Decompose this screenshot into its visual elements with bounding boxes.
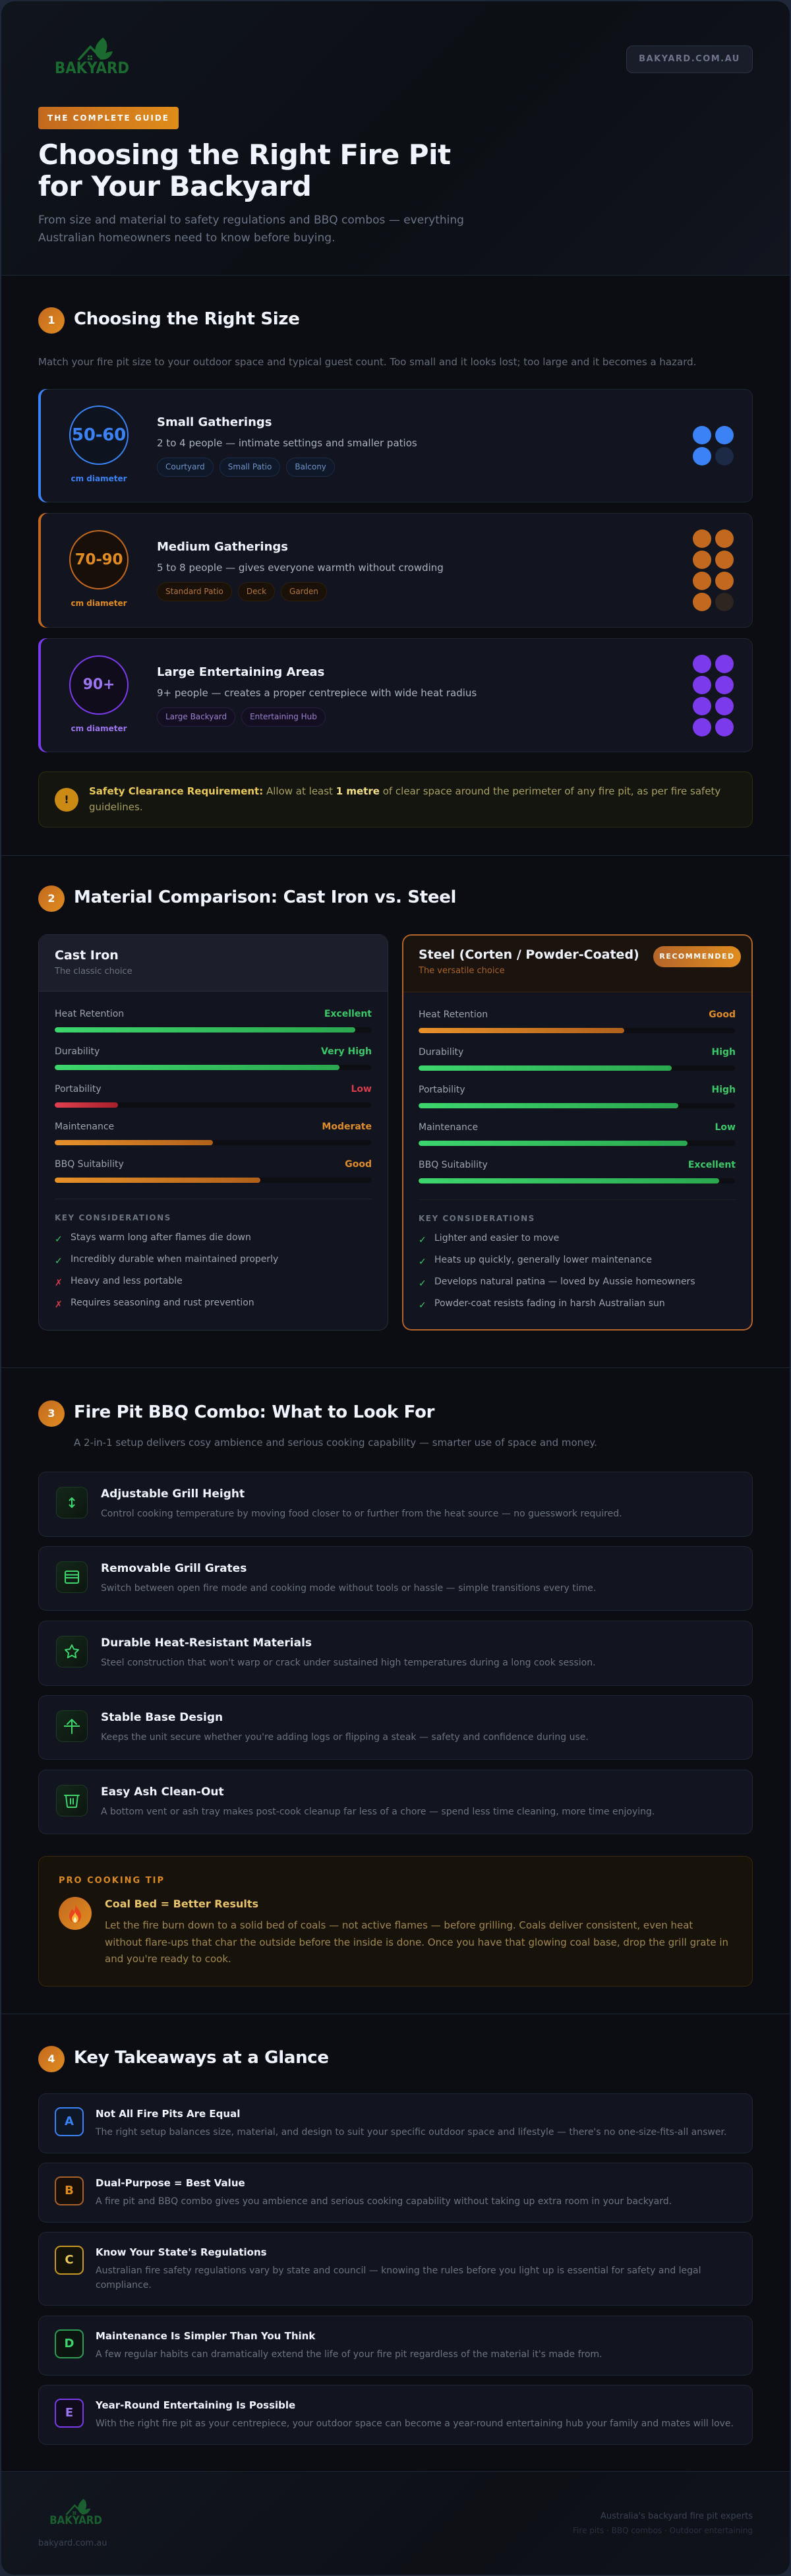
panel: medium gatherings [38, 513, 753, 628]
warning icon [55, 788, 78, 812]
ratings: Low [351, 1084, 372, 1094]
diameter label: cm diameter [71, 724, 127, 733]
diameter ring [69, 405, 129, 465]
location tags: Balcony [295, 462, 326, 471]
feature description: Control cooking temperature by moving food closer to or further from the heat source — no guesswork required. [101, 1509, 622, 1519]
pros and cons list: ✗ [55, 1300, 63, 1310]
panel: small gatherings [38, 389, 753, 502]
card title: Large Entertaining Areas [157, 665, 324, 679]
feature: adjustable grill [38, 1472, 753, 1537]
icon: up-down arrow [56, 1487, 88, 1518]
letter badge [55, 2246, 84, 2275]
panel: cast iron [38, 934, 388, 1331]
logo [55, 38, 129, 73]
pros and cons list: Stays warm long after flames die down [71, 1232, 251, 1243]
feature: ash clean-out [38, 1770, 753, 1834]
footer logo [49, 2499, 102, 2524]
ratings: Maintenance [419, 1122, 478, 1133]
takeaway E [38, 2385, 753, 2445]
section 2 number [38, 885, 65, 912]
feature title: Removable Grill Grates [101, 1562, 247, 1575]
pros and cons list: ✗ [55, 1278, 63, 1288]
section 4 number [38, 2046, 65, 2072]
takeaway B [38, 2163, 753, 2223]
takeaway description: Australian fire safety regulations vary by state and council — knowing the rules before you light up is essential for safety and legal compliance. [96, 2265, 701, 2291]
pros and cons list: Incredibly durable when maintained properly [71, 1254, 278, 1265]
location tags [157, 582, 327, 601]
location tags: Deck [247, 587, 266, 596]
cast iron header [38, 934, 388, 992]
tip title: Coal Bed = Better Results [105, 1898, 258, 1910]
icon: star [56, 1636, 88, 1667]
section 3 number: 3 [47, 1407, 55, 1420]
letter badge [55, 2399, 84, 2428]
section 2 number: 2 [47, 892, 55, 905]
diameter label: cm diameter [71, 599, 127, 608]
section 2 heading: Material Comparison: Cast Iron vs. Steel [74, 887, 456, 907]
ratings: High [711, 1047, 736, 1058]
footer url: bakyard.com.au [38, 2538, 107, 2548]
location tags: Courtyard [165, 462, 205, 471]
letter badge: E [65, 2406, 73, 2420]
ratings: Heat Retention [55, 1009, 124, 1019]
recommended badge [653, 946, 741, 967]
takeaway A [38, 2093, 753, 2153]
takeaway description: With the right fire pit as your centrepiece, your outdoor space can become a year-round entertaining hub your family and mates will love. [96, 2418, 734, 2429]
feature title: Durable Heat-Resistant Materials [101, 1636, 312, 1650]
key considerations: KEY CONSIDERATIONS [55, 1213, 171, 1222]
key considerations: KEY CONSIDERATIONS [419, 1214, 535, 1223]
title [38, 138, 451, 202]
ratings: BBQ Suitability [419, 1160, 488, 1170]
feature description: Switch between open fire mode and cooking mode without tools or hassle — simple transitions every time. [101, 1583, 596, 1594]
site badge [626, 45, 753, 73]
ratings [419, 1009, 736, 1183]
cast iron header: The classic choice [55, 967, 132, 976]
guide tag: THE COMPLETE GUIDE [47, 113, 169, 123]
location tags: Large Backyard [165, 712, 227, 721]
ratings: Low [715, 1122, 736, 1133]
takeaway title: Know Your State's Regulations [96, 2246, 267, 2258]
feature description: Keeps the unit secure whether you're adding logs or flipping a steak — safety and confidence during use. [101, 1732, 589, 1743]
people dots [693, 426, 734, 465]
footer [0, 2471, 791, 2576]
header band [0, 0, 791, 275]
diameter ring: 90+ [83, 676, 115, 693]
diameter ring: 70-90 [75, 551, 123, 568]
safety text: Safety Clearance Requirement: Allow at least 1 metre of clear space around the perimeter of any fire pit, as per fire safety guidelines. [89, 785, 720, 813]
pros and cons list: Requires seasoning and rust prevention [71, 1298, 254, 1308]
guide tag [38, 107, 179, 129]
title: Choosing the Right Fire Pit [38, 138, 451, 171]
ratings: Durability [55, 1046, 100, 1057]
feature: durable materials [38, 1621, 753, 1686]
icon: stable base arrow [56, 1710, 88, 1742]
ratings: Maintenance [55, 1122, 114, 1132]
section 1 number [38, 307, 65, 334]
takeaway title: Not All Fire Pits Are Equal [96, 2108, 240, 2120]
people dots [693, 655, 734, 736]
icon: flame [59, 1897, 92, 1930]
ratings: Portability [419, 1085, 465, 1095]
tip label: PRO COOKING TIP [59, 1876, 165, 1886]
section 3 number [38, 1400, 65, 1427]
pros list: Lighter and easier to move [434, 1233, 559, 1243]
location tags: Small Patio [228, 462, 272, 471]
takeaway C [38, 2232, 753, 2306]
section 1 intro: Match your fire pit size to your outdoor space and typical guest count. Too small and it looks lost; too large and it becomes a hazard. [38, 356, 696, 368]
subtitle: Australian homeowners need to know before buying. [38, 231, 335, 245]
diameter ring: 50-60 [72, 425, 126, 445]
subtitle: From size and material to safety regulations and BBQ combos — everything [38, 214, 464, 227]
section 3 heading: Fire Pit BBQ Combo: What to Look For [74, 1402, 434, 1422]
takeaway title: Dual-Purpose = Best Value [96, 2177, 245, 2189]
warning icon: ! [64, 793, 69, 806]
feature title: Adjustable Grill Height [101, 1487, 245, 1501]
tip body: Let the fire burn down to a solid bed of coals — not active flames — before grilling. Coals deliver consistent, even heat without flare-ups that char the outside before the inside is done. Once you have that glowing coal base, drop the grill grate in and you're ready to cook. [105, 1919, 728, 1965]
pros list: Develops natural patina — loved by Aussie homeowners [434, 1276, 695, 1287]
location tags [157, 707, 326, 727]
location tags: Standard Patio [165, 587, 223, 596]
pros and cons list: Heavy and less portable [71, 1276, 183, 1286]
title: for Your Backyard [38, 170, 311, 202]
letter badge [55, 2329, 84, 2358]
recommended badge: RECOMMENDED [659, 952, 735, 961]
takeaway title: Year-Round Entertaining Is Possible [96, 2399, 295, 2411]
card description: 5 to 8 people — gives everyone warmth without crowding [157, 562, 444, 574]
ratings: Durability [419, 1047, 463, 1058]
letter badge [55, 2107, 84, 2136]
section 4 heading: Key Takeaways at a Glance [74, 2048, 329, 2068]
ratings: Excellent [324, 1009, 372, 1019]
diameter label: cm diameter [71, 474, 127, 483]
feature title: Easy Ash Clean-Out [101, 1785, 224, 1799]
steel header: Steel (Corten / Powder-Coated) [419, 947, 639, 962]
pros list [419, 1233, 695, 1311]
pros and cons list: ✓ [55, 1234, 63, 1245]
section 4 number: 4 [47, 2052, 55, 2065]
letter badge [55, 2176, 84, 2205]
location tags: Garden [289, 587, 318, 596]
site badge: BAKYARD.COM.AU [639, 54, 740, 64]
pros list: ✓ [419, 1235, 426, 1245]
takeaway description: The right setup balances size, material, and design to suit your specific outdoor space and lifestyle — there's no one-size-fits-all answer. [96, 2127, 726, 2138]
letter badge: A [65, 2114, 74, 2128]
panel: large entertaining [38, 638, 753, 752]
icon: ash tray [56, 1785, 88, 1816]
icon: grate [56, 1561, 88, 1593]
ratings: High [711, 1085, 736, 1095]
safety callout [38, 771, 753, 827]
footer tagline: Australia's backyard fire pit experts [601, 2511, 753, 2521]
ratings: Very High [321, 1046, 372, 1057]
panel: steel [402, 934, 753, 1331]
pros list: ✓ [419, 1257, 426, 1267]
card title: Medium Gatherings [157, 540, 288, 554]
steel header [402, 934, 753, 992]
section 3 intro: A 2-in-1 setup delivers cosy ambience and serious cooking capability — smarter use of space and money. [74, 1437, 597, 1449]
takeaway description: A few regular habits can dramatically extend the life of your fire pit regardless of the material it's made from. [96, 2349, 602, 2360]
pros list: Powder-coat resists fading in harsh Australian sun [434, 1298, 665, 1309]
ratings: Moderate [322, 1122, 372, 1132]
cast iron header: Cast Iron [55, 948, 119, 963]
pro cooking tip [38, 1856, 753, 1987]
takeaway description: A fire pit and BBQ combo gives you ambience and serious cooking capability without taking up extra room in your backyard. [96, 2196, 672, 2207]
ratings: BBQ Suitability [55, 1159, 124, 1170]
pros and cons list [55, 1232, 278, 1310]
feature description: Steel construction that won't warp or crack under sustained high temperatures during a long cook session. [101, 1658, 596, 1668]
subtitle [38, 214, 464, 245]
takeaway D [38, 2316, 753, 2376]
pros list: ✓ [419, 1278, 426, 1289]
ratings: Portability [55, 1084, 102, 1094]
card title: Small Gatherings [157, 415, 272, 429]
ratings [55, 1009, 372, 1183]
diameter ring [69, 530, 129, 589]
people dots [693, 529, 734, 611]
letter badge: B [65, 2184, 74, 2198]
letter badge: D [65, 2337, 74, 2351]
location tags [157, 458, 335, 477]
ratings: Good [345, 1159, 372, 1170]
pros list: Heats up quickly, generally lower maintenance [434, 1255, 652, 1265]
card description: 2 to 4 people — intimate settings and smaller patios [157, 437, 417, 449]
pros list: ✓ [419, 1300, 426, 1311]
ratings: Excellent [688, 1160, 736, 1170]
section 1 heading: Choosing the Right Size [74, 309, 300, 329]
card description: 9+ people — creates a proper centrepiece with wide heat radius [157, 687, 477, 699]
ratings: Heat Retention [419, 1009, 488, 1020]
feature: stable base [38, 1695, 753, 1760]
section 1 number: 1 [47, 314, 55, 326]
ratings: Good [709, 1009, 736, 1020]
pros and cons list: ✓ [55, 1256, 63, 1267]
steel header: The versatile choice [419, 966, 505, 976]
location tags: Entertaining Hub [250, 712, 317, 721]
footer topics: Fire pits · BBQ combos · Outdoor entertaining [573, 2526, 753, 2535]
diameter ring [69, 655, 129, 715]
letter badge: C [65, 2253, 74, 2267]
takeaway title: Maintenance Is Simpler Than You Think [96, 2330, 315, 2342]
feature description: A bottom vent or ash tray makes post-cook cleanup far less of a chore — spend less time cleaning, more time enjoying. [101, 1807, 655, 1817]
feature title: Stable Base Design [101, 1711, 223, 1724]
feature: removable grates [38, 1546, 753, 1611]
